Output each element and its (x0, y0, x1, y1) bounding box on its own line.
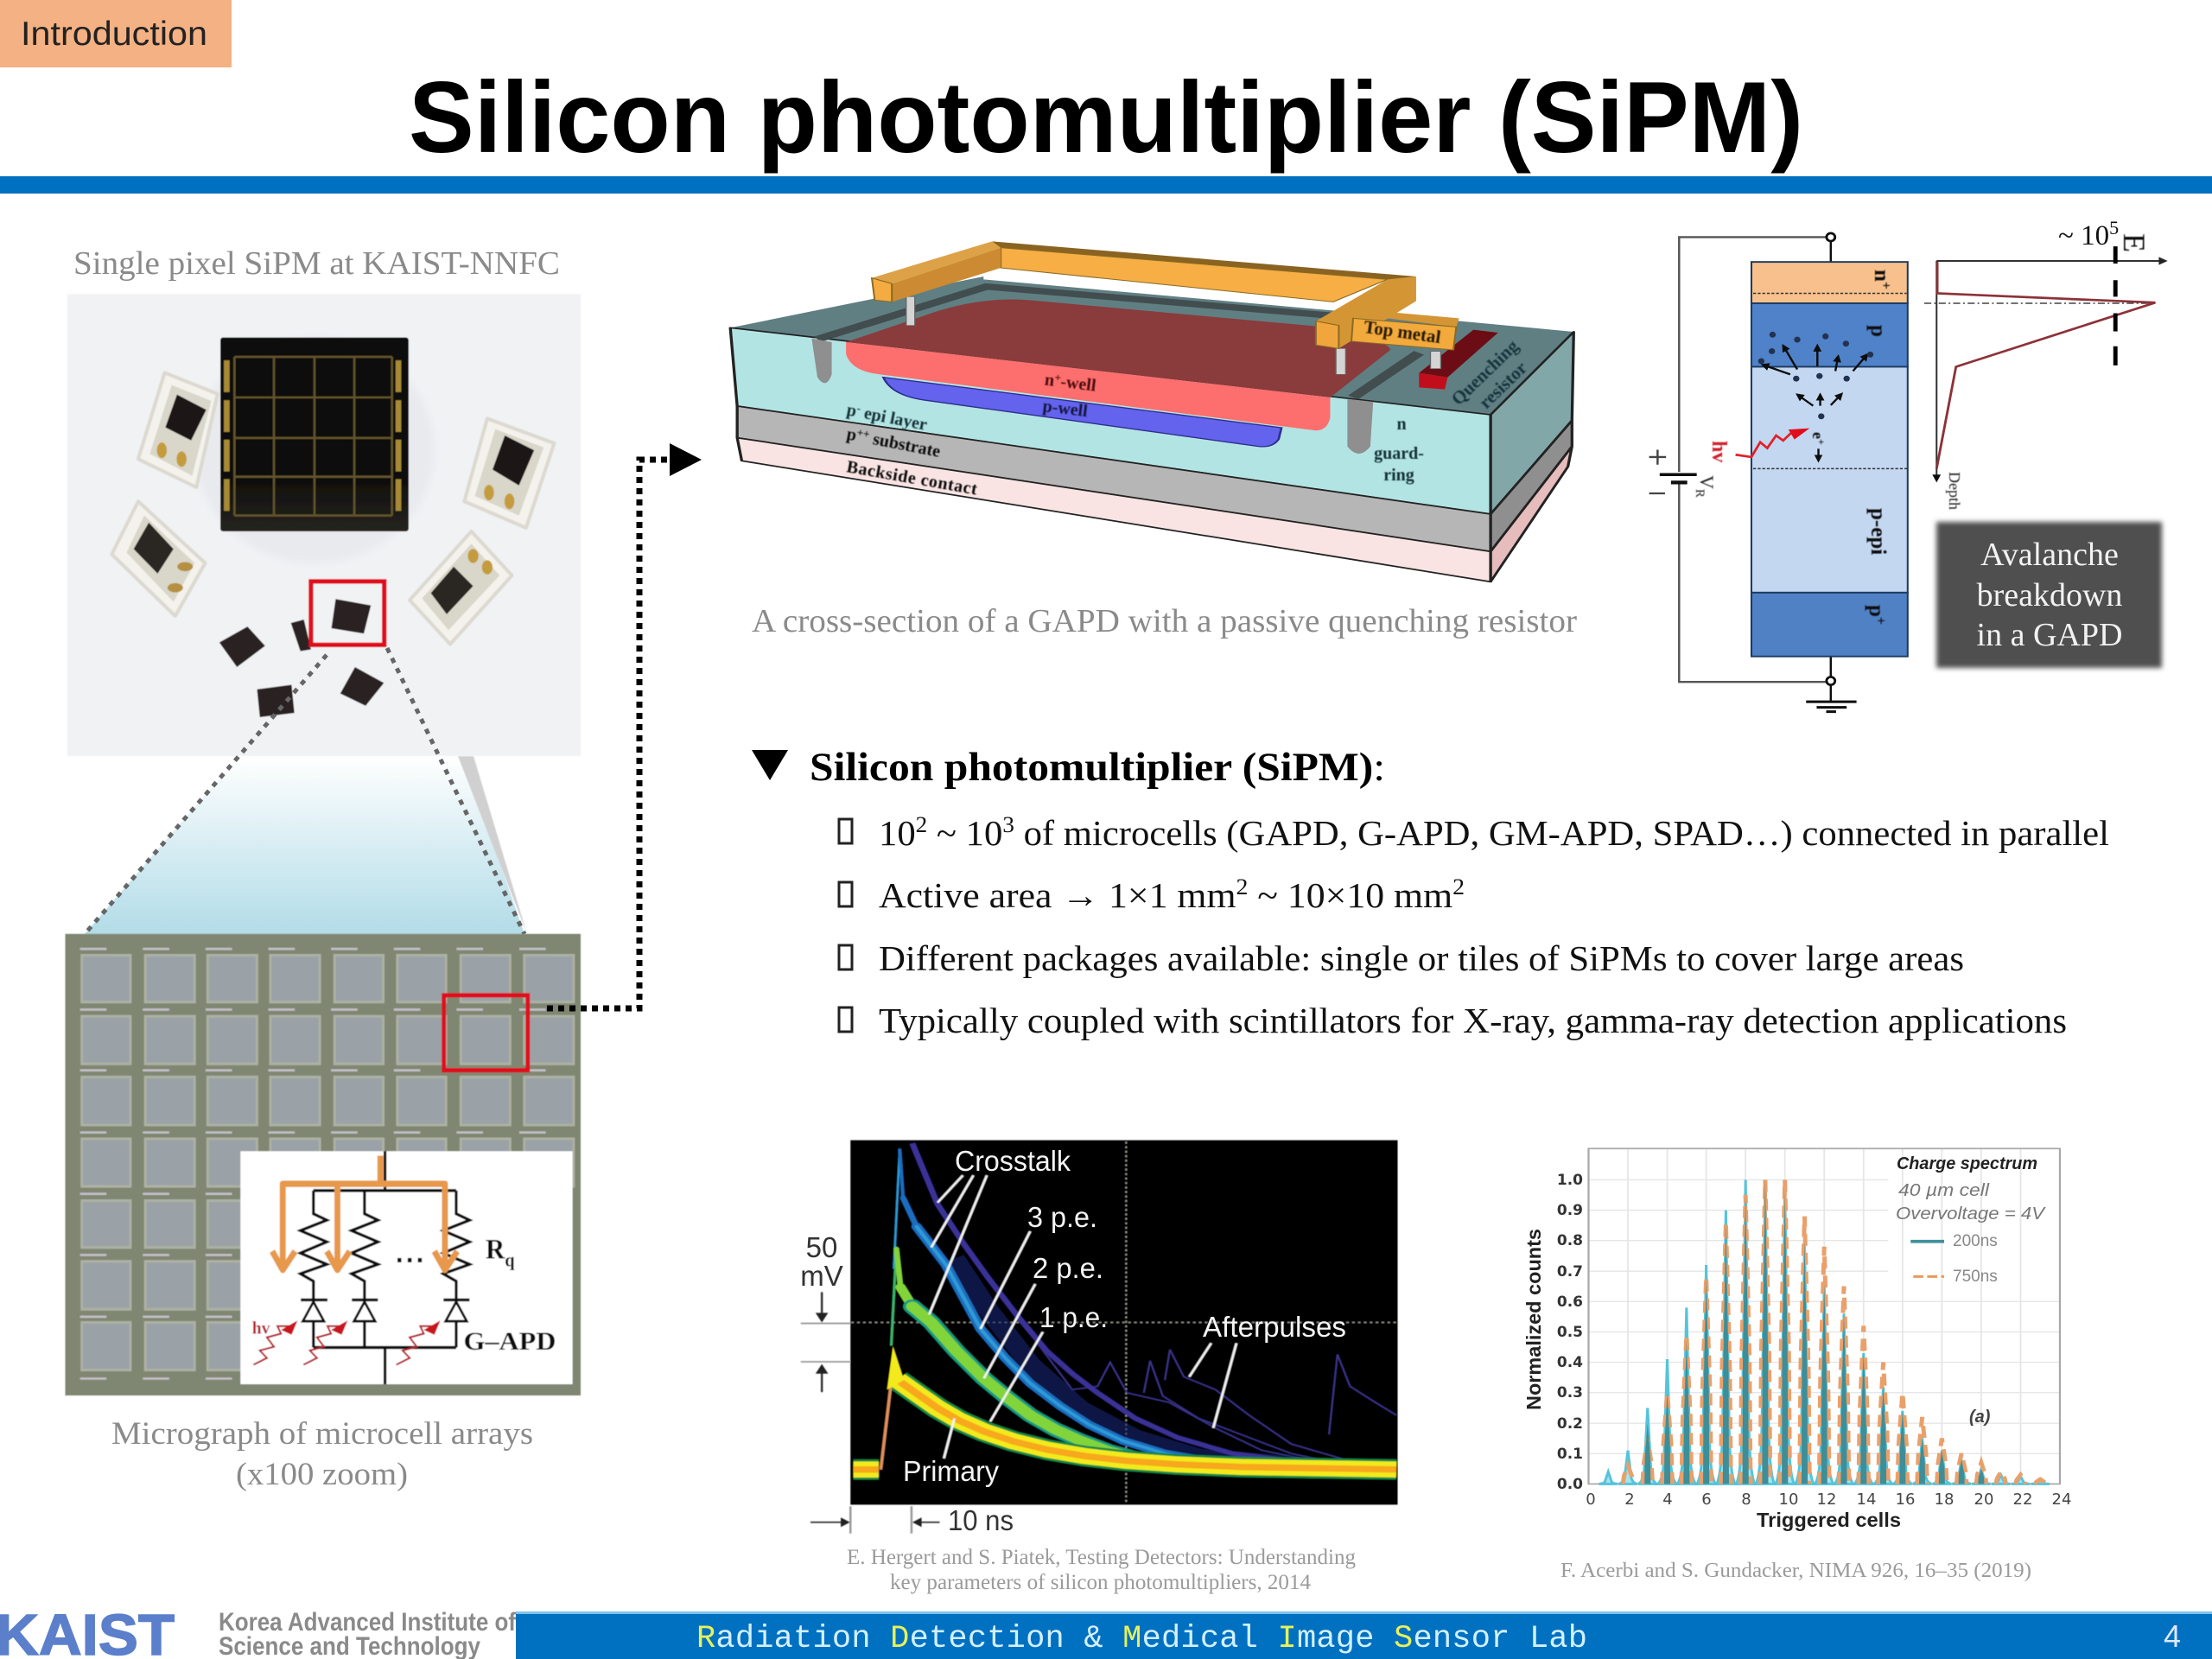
scale marks (801, 1292, 940, 1534)
cross-section labels: n (1396, 415, 1407, 434)
highlight box on die (311, 582, 385, 645)
cross-section labels: n (1044, 370, 1056, 391)
cross-section labels: Quenching (1447, 335, 1522, 410)
bullet 2: Active area → 1×1 mm (879, 875, 1213, 915)
icon: bare SiPM dies (219, 599, 384, 717)
logo: KAIST: Korea Advanced Institute of (219, 1608, 517, 1637)
legend text: 40 µm cell (1898, 1181, 1990, 1200)
scale labels: 50 (806, 1231, 837, 1263)
reference: Hergert and Piatek: key parameters of silicon photomultipliers, 2014 (890, 1571, 1311, 1594)
bullet 2 (839, 874, 1465, 915)
heading: Silicon photomultiplier (SiPM) : (810, 745, 1385, 790)
chart: charge spectrum (1522, 1148, 2071, 1531)
cross-section labels: Top metal (1363, 316, 1442, 347)
y axis ticks: 0.7 (1557, 1263, 1583, 1281)
plot annotations (903, 1145, 1346, 1487)
wells (846, 300, 1390, 397)
icon: photocurrent arrows (272, 1156, 457, 1270)
cross-section labels: -well (1059, 372, 1097, 396)
GAPD rotated labels: Depth (1946, 472, 1963, 510)
bullet 4: Typically coupled with scintillators for X-ray, gamma-ray detection applications (879, 1001, 2067, 1040)
zoom glow between photo and micrograph (85, 756, 527, 934)
GAPD rotated labels: p (1866, 325, 1890, 337)
4 p.e. trace (912, 1143, 1325, 1465)
plot annotations: 1 p.e. (1039, 1301, 1108, 1333)
cross-section labels: guard- (1374, 444, 1424, 463)
cross-section labels: p-well (1041, 397, 1089, 421)
plot annotations: Afterpulses (1203, 1311, 1346, 1343)
bullet 3: Different packages available: single or tiles of SiPMs to cover large areas (879, 938, 1964, 978)
bullet 2: 2 (1452, 874, 1465, 899)
scale labels: 10 ns (948, 1504, 1014, 1536)
bullet 1: of microcells (GAPD, G-APD, GM-APD, SPAD…) connected in parallel (1014, 813, 2109, 853)
afterpulse traces (1039, 1344, 1396, 1465)
label: field peak value: ~ 10 (2058, 220, 2109, 251)
series: 750 ns (1623, 1179, 2045, 1484)
inset: equivalent circuit: ... (396, 1236, 423, 1269)
reference: Hergert and Piatek: E. Hergert and S. Piatek, Testing Detectors: Understanding (847, 1546, 1356, 1569)
cross-section labels: - (855, 401, 862, 415)
icon: large tiled SiPM array (220, 338, 409, 531)
y axis ticks: 0.3 (1557, 1384, 1583, 1402)
caption: cross-section: A cross-section of a GAPD with a passive quenching resistor (752, 603, 1577, 639)
title: Silicon photomultiplier (SiPM) (409, 60, 1803, 174)
axis titles: Triggered cells (1757, 1509, 1901, 1531)
arrow: microcell to cross-section (547, 443, 702, 1008)
lab name: Radiation Detection & Medical Image Sensor Lab (696, 1621, 1587, 1657)
section tab: Introduction: Introduction (21, 16, 207, 53)
3 p.e. trace (893, 1150, 1219, 1463)
cross-section labels: epi layer (858, 403, 929, 435)
x axis ticks: 2 (1624, 1491, 1635, 1509)
caption: micrograph: (x100 zoom) (236, 1457, 408, 1492)
1 p.e. trace (854, 1364, 1396, 1470)
legend text: 200ns (1953, 1232, 1998, 1250)
series: 200 ns (1599, 1179, 2050, 1484)
x axis ticks: 24 (2052, 1491, 2071, 1509)
x axis ticks: 18 (1935, 1491, 1954, 1509)
grid cross (851, 1141, 1396, 1503)
diagram: GAPD cross-section (730, 241, 1573, 582)
caption: micrograph (111, 1416, 533, 1492)
bullet 2: 2 (1236, 874, 1248, 899)
GAPD rotated labels: hv (1707, 441, 1730, 462)
cross-section labels: Backside contact (845, 457, 979, 499)
x axis ticks (1586, 1491, 2071, 1509)
cross-section labels: ++ (855, 425, 871, 441)
GAPD rotated labels: p-epi (1866, 508, 1890, 555)
x axis ticks: 10 (1779, 1491, 1798, 1509)
x axis ticks: 4 (1662, 1491, 1673, 1509)
callout: avalanche breakdown: Avalanche (1980, 537, 2119, 573)
caption: single pixel SiPM: Single pixel SiPM at KAIST-NNFC (73, 245, 560, 282)
axis titles: Normalized counts (1522, 1229, 1545, 1410)
callout: avalanche breakdown: breakdown (1977, 577, 2122, 613)
x axis ticks: 14 (1857, 1491, 1876, 1509)
inset: equivalent circuit: G–APD (464, 1327, 556, 1356)
chart: oscilloscope persistence plot (800, 1141, 1397, 1536)
diagram: avalanche breakdown in a GAPD (1649, 233, 2168, 712)
GAPD rotated labels: n (1870, 270, 1893, 282)
x axis ticks: 16 (1896, 1491, 1915, 1509)
cross-section labels: p (845, 400, 858, 421)
GAPD rotated labels: + (1815, 439, 1827, 445)
electric field plot (1924, 246, 2168, 482)
quenching resistor (1419, 330, 1498, 378)
legend text: Overvoltage = 4V (1896, 1205, 2046, 1224)
inset: equivalent circuit: q (505, 1249, 515, 1271)
panel: microcell micrograph (66, 934, 581, 1395)
callout: avalanche breakdown: in a GAPD (1977, 617, 2122, 653)
x axis ticks: 0 (1586, 1491, 1596, 1509)
y axis ticks: 0.6 (1557, 1294, 1583, 1311)
legend text: (a) (1969, 1408, 1991, 1427)
GAPD rotated labels: e (1809, 432, 1827, 439)
icon: packaged SiPMs (111, 372, 554, 645)
y axis ticks: 0.2 (1557, 1415, 1583, 1433)
legend text: Charge spectrum (1897, 1154, 2037, 1173)
x axis ticks: 8 (1741, 1491, 1751, 1509)
bias circuit (1679, 237, 1831, 682)
inset: equivalent circuit: hv (252, 1319, 270, 1338)
y axis ticks: 0.0 (1557, 1476, 1583, 1493)
label: field peak value: 5 (2109, 217, 2119, 238)
x axis ticks: 20 (1974, 1491, 1993, 1509)
series core (1644, 1179, 1984, 1484)
y axis ticks: 1.0 (1557, 1172, 1583, 1189)
incident photon (1736, 432, 1792, 457)
bullet 1: ~ 10 (927, 813, 1002, 853)
highlight box on microcell (444, 995, 528, 1071)
caption: micrograph: Micrograph of microcell arrays (111, 1416, 533, 1452)
cross-section labels: p (845, 424, 858, 445)
icon: incoming photons (253, 1326, 433, 1364)
top surface (730, 276, 1573, 415)
reference: Acerbi and Gundacker: F. Acerbi and S. Gundacker, NIMA 926, 16–35 (2019) (1560, 1560, 2031, 1582)
cross-section labels: + (1054, 371, 1062, 385)
reference: Hergert and Piatek (847, 1546, 1356, 1594)
zoom guide lines (85, 648, 524, 934)
cross-section labels: ring (1383, 466, 1414, 485)
bullet 1: 3 (1002, 812, 1014, 837)
plot annotations: Primary (903, 1455, 999, 1487)
scale labels: mV (800, 1260, 843, 1292)
panel: SiPM photograph (67, 294, 581, 756)
plot annotations: 2 p.e. (1033, 1252, 1103, 1284)
GAPD rotated labels: + (1878, 282, 1893, 289)
guard ring trench (817, 287, 1419, 397)
axis titles (1522, 1229, 1901, 1531)
header rule (0, 176, 2212, 194)
x axis ticks: 6 (1701, 1491, 1712, 1509)
inset: equivalent circuit: R (486, 1233, 505, 1265)
GAPD rotated labels: p (1865, 605, 1888, 617)
section tab: Introduction (0, 0, 232, 67)
plot annotations: Crosstalk (955, 1145, 1071, 1177)
2 p.e. trace (892, 1249, 1219, 1467)
y axis ticks: 0.8 (1557, 1232, 1583, 1249)
GAPD rotated labels: V (1696, 475, 1718, 489)
bullet 1: 2 (916, 812, 927, 837)
leader lines (929, 1175, 1236, 1459)
x axis ticks: 12 (1817, 1491, 1836, 1509)
x axis ticks: 22 (2013, 1491, 2032, 1509)
legend text: 750ns (1953, 1268, 1998, 1286)
bullet 1: 10 (879, 813, 914, 853)
callout: avalanche breakdown (1936, 522, 2162, 668)
page number: 4 (2164, 1618, 2181, 1654)
y axis ticks: 0.5 (1557, 1324, 1583, 1341)
device layers (1751, 262, 1908, 657)
legend keys (1910, 1236, 1944, 1246)
GAPD rotated labels: E (2117, 233, 2152, 252)
GAPD rotated labels: R (1693, 489, 1707, 498)
legend text (1896, 1154, 2046, 1427)
plot grid (1588, 1148, 2060, 1484)
y axis ticks (1557, 1172, 1583, 1493)
footer bar (0, 1603, 2212, 1659)
metal contacts and bars (906, 296, 1440, 374)
bullet 2: ~ 10×10 mm (1248, 875, 1452, 915)
logo: KAIST (0, 1603, 517, 1659)
scale labels (800, 1231, 1014, 1536)
GAPD rotated labels (1693, 233, 2152, 625)
plot annotations: 3 p.e. (1027, 1201, 1097, 1233)
microcell grid (82, 956, 574, 1370)
electron avalanche arrows (1763, 346, 1867, 461)
cross-section labels (845, 316, 1531, 499)
dim halo between traces (955, 1258, 1325, 1466)
cross-section labels: substrate (868, 429, 942, 461)
y axis ticks: 0.9 (1557, 1202, 1583, 1219)
inset: equivalent circuit (240, 1151, 573, 1384)
front layers (730, 327, 1573, 582)
y axis ticks: 0.4 (1557, 1354, 1583, 1371)
GAPD rotated labels: + (1873, 617, 1888, 625)
text block: SiPM description (752, 745, 2109, 1040)
y axis ticks: 0.1 (1557, 1446, 1583, 1463)
cross-section labels: resistor (1475, 358, 1531, 413)
